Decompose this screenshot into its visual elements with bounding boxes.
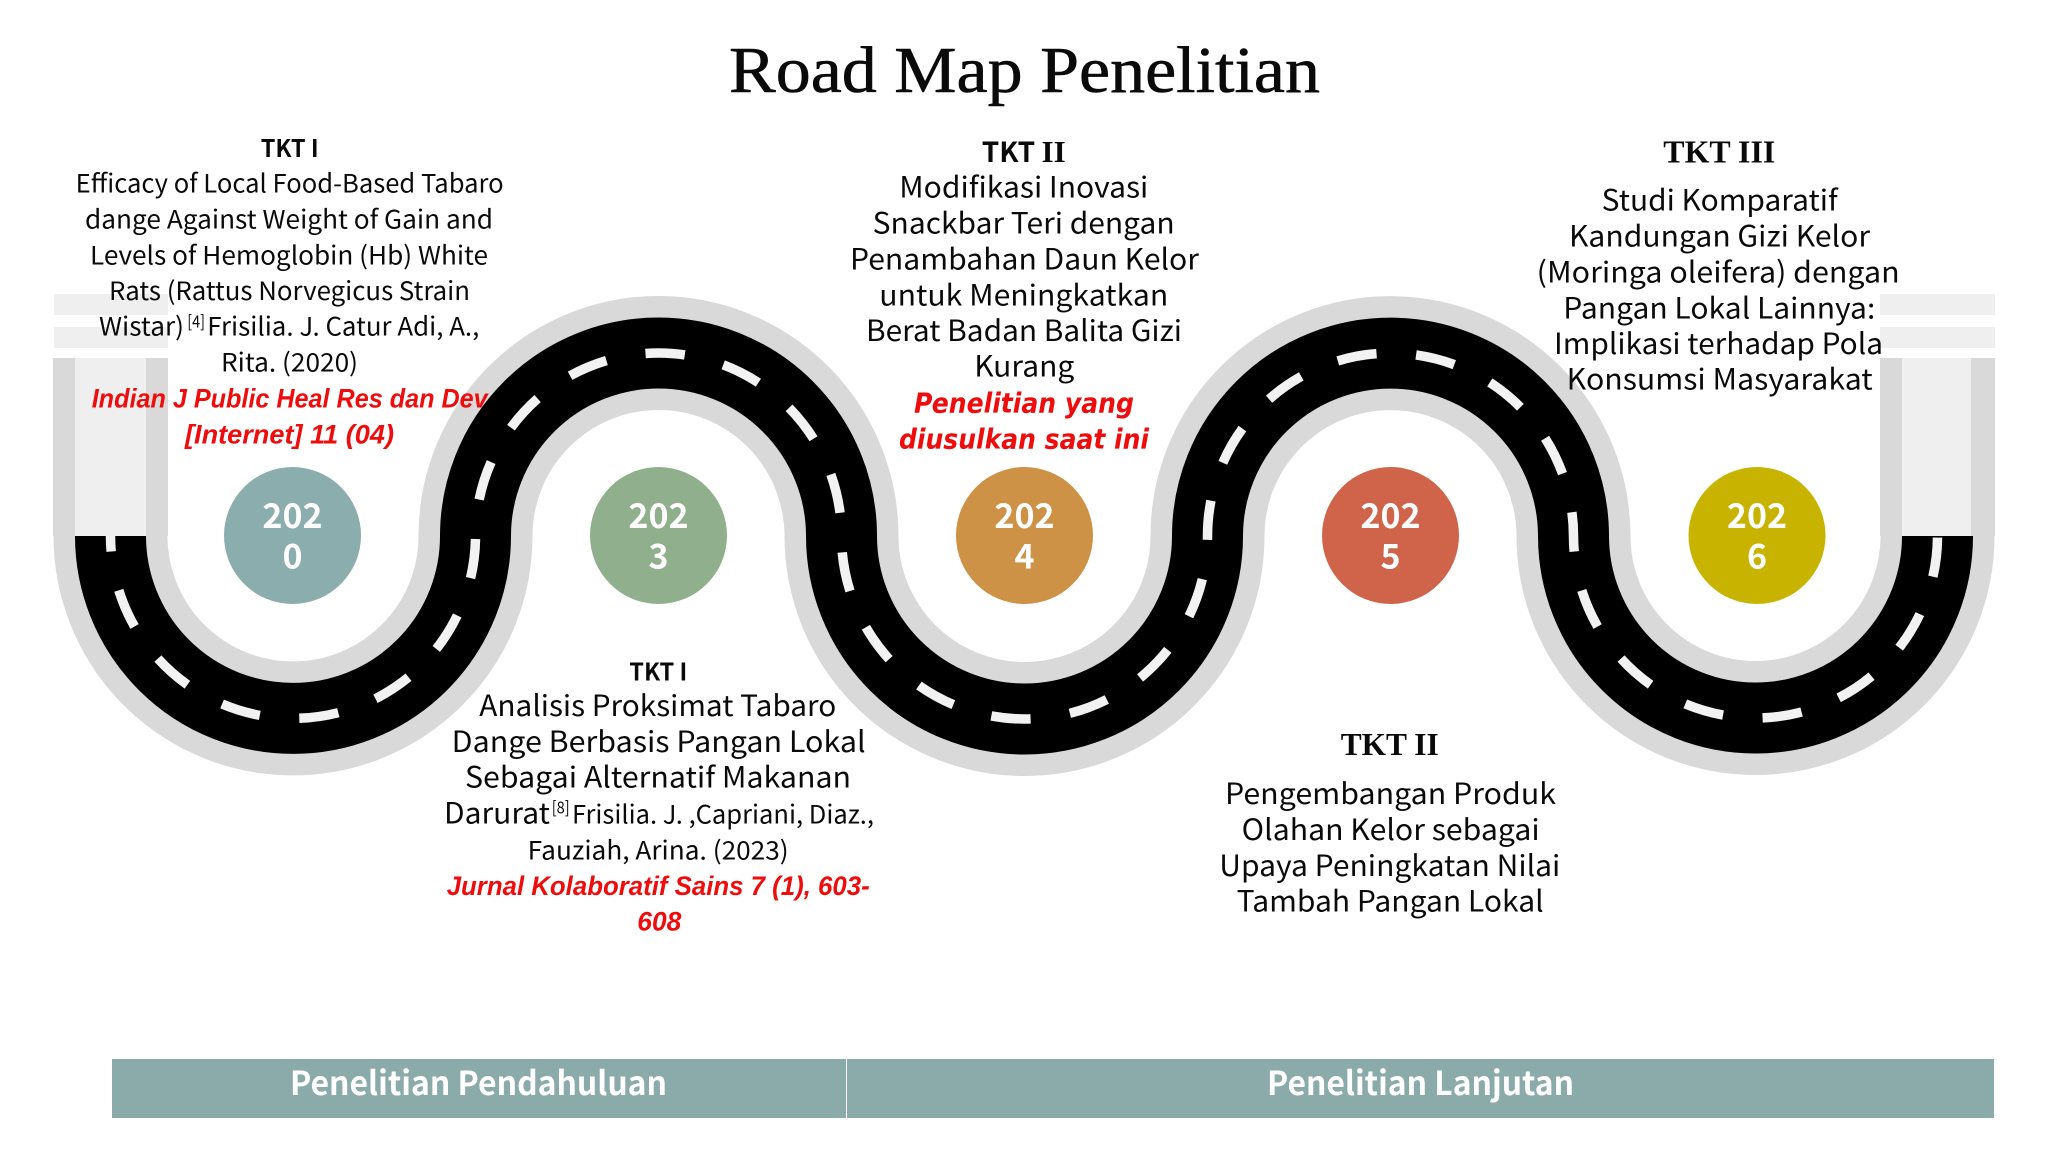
- year marker 2023: [590, 467, 727, 604]
- text block: 2024 TKT II: Modifikasi Inovasi: [899, 165, 1148, 207]
- text block: 2023 TKT I: 608: [637, 907, 681, 937]
- text block: 2026 TKT III: (Moringa oleifera) dengan: [1537, 249, 1900, 291]
- text block: 2020 TKT I: dange Against Weight of Gain and: [85, 199, 493, 236]
- winding road: [53, 294, 1995, 719]
- year marker 2026: [1688, 467, 1826, 604]
- year marker 2020: 0: [282, 530, 303, 578]
- phase: Penelitian Lanjutan: Penelitian Lanjutan: [1267, 1057, 1574, 1105]
- text block: 2020 TKT I: Indian J Public Heal Res dan Dev: [92, 384, 490, 414]
- text block: 2023 TKT I: Analisis Proksimat Tabaro: [479, 683, 836, 725]
- text block: 2025 TKT II: Pengembangan Produk: [1225, 771, 1556, 813]
- text block: 2023 TKT I: Sebagai Alternatif Makanan: [465, 755, 851, 797]
- phase bar: [112, 1057, 1994, 1118]
- text block: 2023 TKT I: [444, 654, 874, 937]
- text block: 2020 TKT I: Rita. (2020): [221, 343, 358, 380]
- text block: 2024 TKT II: Kurang: [974, 344, 1074, 386]
- text block: 2024 TKT II: TKT II: [982, 131, 1066, 171]
- text block: 2026 TKT III: Pangan Lokal Lainnya:: [1563, 285, 1875, 327]
- text block: 2020 TKT I: Efficacy of Local Food-Based Tabaro: [76, 164, 504, 201]
- text block: 2026 TKT III: Kandungan Gizi Kelor: [1569, 214, 1871, 256]
- text block: 2020 TKT I: [Internet] 11 (04): [184, 419, 394, 449]
- year marker 2026: 6: [1747, 530, 1767, 578]
- year marker 2020: 202: [262, 489, 323, 538]
- text block: 2026 TKT III: Konsumsi Masyarakat: [1567, 356, 1873, 398]
- text block: 2020 TKT I: Frisilia. J. Catur Adi, A.,: [207, 307, 479, 344]
- text block: 2020 TKT I: [4]: [187, 308, 205, 332]
- phase: Penelitian Pendahuluan: Penelitian Pendahuluan: [290, 1057, 667, 1105]
- road start approach: left: [53, 294, 168, 536]
- text block: 2024 TKT II: Penelitian yang: [914, 387, 1134, 420]
- text block: 2020 TKT I: Levels of Hemoglobin (Hb) White: [90, 235, 488, 272]
- text block: 2024 TKT II: Berat Badan Balita Gizi: [866, 308, 1182, 350]
- text block: 2025 TKT II: TKT II: [1341, 726, 1439, 762]
- road centre dashes: [110, 353, 1938, 719]
- text block: 2023 TKT I: Dange Berbasis Pangan Lokal: [452, 719, 866, 761]
- text block: 2020 TKT I: [76, 130, 504, 449]
- road shoulder: [110, 353, 1938, 719]
- text block: 2023 TKT I: Fauziah, Arina. (2023): [528, 830, 789, 867]
- text block: 2020 TKT I: TKT I: [261, 130, 319, 165]
- year marker 2024: 4: [1014, 530, 1035, 578]
- year marker 2025: [1322, 467, 1459, 604]
- road end approach: right: [1880, 294, 1995, 536]
- year marker 2020: [224, 467, 361, 604]
- text block: 2026 TKT III: [1537, 133, 1900, 398]
- text block: 2023 TKT I: TKT I: [629, 654, 687, 688]
- year marker 2025: 5: [1380, 530, 1401, 578]
- year marker 2024: 202: [994, 489, 1055, 538]
- text block: 2025 TKT II: Tambah Pangan Lokal: [1237, 879, 1544, 921]
- text block: 2026 TKT III: Implikasi terhadap Pola: [1554, 321, 1883, 363]
- phase: Penelitian Pendahuluan: [112, 1057, 846, 1118]
- phase: Penelitian Lanjutan: [847, 1057, 1994, 1118]
- year marker 2023: 3: [648, 530, 669, 578]
- text block: 2025 TKT II: [1219, 726, 1560, 921]
- text block: 2024 TKT II: [850, 131, 1200, 455]
- text block: 2020 TKT I: Wistar): [99, 307, 184, 344]
- year marker 2023: 202: [628, 489, 689, 538]
- year marker 2026: 202: [1727, 489, 1787, 538]
- text block: 2023 TKT I: Frisilia. J. ,Capriani, Diaz.,: [572, 794, 874, 831]
- road asphalt: [110, 353, 1938, 719]
- text block: 2024 TKT II: Snackbar Teri dengan: [873, 201, 1175, 243]
- text block: 2026 TKT III: Studi Komparatif: [1602, 178, 1839, 220]
- text block: 2025 TKT II: Upaya Peningkatan Nilai: [1219, 843, 1560, 885]
- text block: 2026 TKT III: TKT III: [1663, 133, 1775, 169]
- year marker 2024: [956, 467, 1093, 604]
- text block: 2020 TKT I: Rats (Rattus Norvegicus Strain: [109, 271, 470, 308]
- text block: 2024 TKT II: diusulkan saat ini: [899, 422, 1149, 455]
- year marker 2025: 202: [1360, 489, 1421, 538]
- text block: 2024 TKT II: Penambahan Daun Kelor: [850, 237, 1200, 279]
- title: Road Map Penelitian: [729, 34, 1320, 107]
- text block: 2024 TKT II: untuk Meningkatkan: [879, 272, 1168, 314]
- text block: 2025 TKT II: Olahan Kelor sebagai: [1242, 807, 1540, 849]
- text block: 2023 TKT I: [8]: [552, 794, 570, 818]
- text block: 2023 TKT I: Darurat: [444, 790, 550, 832]
- text block: 2023 TKT I: Jurnal Kolaboratif Sains 7 (1), 603-: [447, 871, 870, 901]
